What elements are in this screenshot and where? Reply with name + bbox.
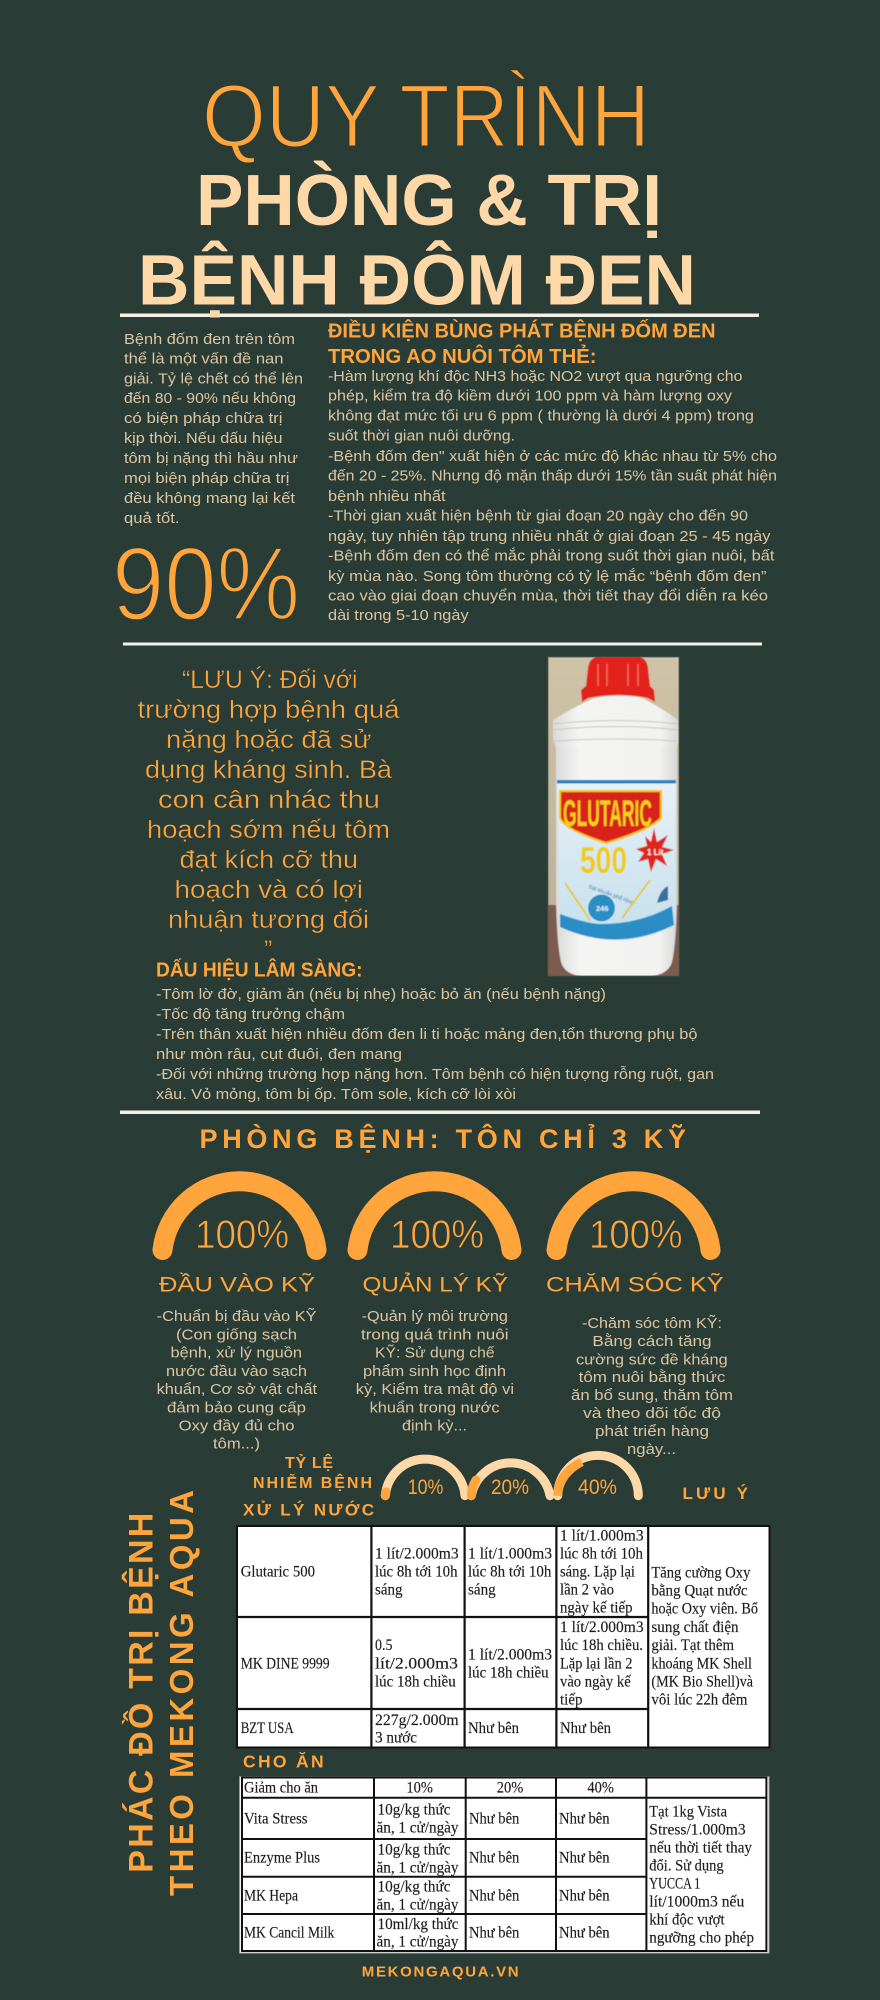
gauge: quản lý kỹ (358, 1181, 512, 1297)
table: feeding: MK Hepa (244, 1887, 298, 1904)
title: BỆNH ĐÔM ĐEN (138, 241, 696, 321)
note heading: LƯU Ý (682, 1484, 749, 1503)
table: water treatment: khoáng MK Shell (651, 1655, 752, 1672)
text: quản lý kỹ: kỳ, Kiểm tra mật độ vi (356, 1382, 514, 1398)
table: water treatment: sáng. Lặp lại (560, 1564, 635, 1581)
table: feeding: 40% (587, 1780, 614, 1797)
table: feeding: ăn, 1 cử/ngày (376, 1820, 458, 1837)
table: water treatment: 1 lít/2.000m3 (560, 1619, 644, 1636)
text: chăm sóc kỹ: Bằng cách tăng (592, 1333, 712, 1350)
outbreak conditions text: -Bệnh đốm đen có thể mắc phải trong suốt thời gian nuôi, bất (328, 548, 774, 565)
table: water treatment: 227g/2.000m (375, 1712, 459, 1729)
table: water treatment: sáng (468, 1582, 496, 1599)
title: PHÒNG & TRỊ (196, 160, 662, 241)
small gauge 10%: 10% (408, 1476, 443, 1499)
table: water treatment: BZT USA (241, 1720, 294, 1737)
table: feeding: Như bên (469, 1850, 519, 1867)
table: water treatment: MK DINE 9999 (241, 1655, 330, 1672)
text: quản lý kỹ (356, 1309, 514, 1434)
outbreak conditions text: không đạt mức tối ưu 6 ppm ( thường là dưới 4 ppm) trong (328, 408, 754, 424)
gauge: quản lý kỹ: QUẢN LÝ KỸ (362, 1273, 508, 1297)
outbreak conditions text: -Bệnh đốm đen" xuất hiện ở các mức độ khác nhau từ 5% cho (328, 449, 777, 465)
table: water treatment: 0.5 (375, 1637, 392, 1654)
table: feeding: 10% (406, 1780, 433, 1797)
outbreak conditions text: ngày, tuy nhiên tập trung nhiều nhất ở giai đoạn 25 - 45 ngày (328, 529, 771, 545)
text: chăm sóc kỹ: cường sức đề kháng (576, 1352, 728, 1368)
table: water treatment: ngày kế tiếp (560, 1600, 632, 1617)
infection rate label: TỶ LỆ (285, 1453, 333, 1472)
table: water treatment: lúc 18h chiều (375, 1674, 456, 1691)
table: feeding: Như bên (469, 1925, 519, 1942)
outbreak conditions text: -Thời gian xuất hiện bệnh từ giai đoạn 20 ngày cho đến 90 (328, 509, 748, 525)
outbreak conditions text: -Hàm lượng khí độc NH3 hoặc NO2 vượt qua ngưỡng cho (328, 369, 742, 385)
table: water treatment: tiếp (560, 1692, 582, 1709)
outbreak conditions heading (328, 318, 716, 368)
outbreak conditions text: dài trong 5-10 ngày (328, 608, 469, 624)
outbreak conditions heading: ĐIỀU KIỆN BÙNG PHÁT BỆNH ĐỐM ĐEN (328, 318, 716, 342)
quote: note: nhuận tương đối (168, 906, 369, 934)
intro text block: giải. Tỷ lệ chết có thể lên (124, 372, 303, 388)
text: quản lý kỹ: trong quá trình nuôi (361, 1327, 508, 1343)
prevention heading: PHÒNG BỆNH: TÔN CHỈ 3 KỸ (200, 1122, 686, 1154)
outbreak conditions text: cao vào giai đoạn chuyển mùa, thời tiết thay đổi diễn ra kéo (328, 588, 768, 605)
table: feeding: Như bên (559, 1811, 610, 1828)
table: water treatment: bằng Quạt nước (651, 1582, 748, 1599)
intro text block: quả tốt. (124, 511, 180, 527)
table: water treatment: lúc 18h chiều (468, 1664, 549, 1681)
quote: note: ” (264, 936, 272, 964)
text: đầu vào kỹ: tôm...) (213, 1436, 260, 1452)
table: water treatment: 1 lít/2.000m3 (375, 1546, 459, 1563)
text: chăm sóc kỹ: phát triển hàng (595, 1424, 709, 1440)
intro text block: đến 80 - 90% nếu không (124, 391, 296, 407)
table: water treatment: lít/2.000m3 (375, 1655, 458, 1672)
infection rate label: NHIỄM BỆNH (253, 1473, 372, 1492)
text: đầu vào kỹ: Oxy đầy đủ cho (179, 1418, 295, 1434)
text: chăm sóc kỹ: ngày... (627, 1442, 676, 1458)
table: water treatment: lúc 18h chiều. (560, 1637, 643, 1654)
table: feeding: khí độc vượt (649, 1912, 725, 1929)
quote: note: trường hợp bệnh quá (138, 696, 400, 724)
text: đầu vào kỹ (157, 1308, 317, 1452)
table: water treatment: 1 lít/2.000m3 (468, 1646, 552, 1663)
clinical signs text: xâu. Vỏ mỏng, tôm bị ốp. Tôm sole, kích cỡ lòi xòi (156, 1087, 516, 1103)
text: chăm sóc kỹ: và theo dõi tốc độ (583, 1406, 721, 1422)
quote: note: dụng kháng sinh. Bà (145, 756, 392, 784)
table: feeding: MK Cancil Milk (244, 1925, 334, 1942)
clinical signs text: -Tôm lờ đờ, giảm ăn (nếu bị nhẹ) hoặc bỏ ăn (nếu bệnh nặng) (156, 987, 606, 1003)
title: QUY TRÌNH (202, 66, 650, 166)
vertical heading: PHÁC ĐỒ TRỊ BỆNH (122, 1513, 160, 1873)
table: feeding: Enzyme Plus (244, 1850, 320, 1867)
product photo: Glutaric 500 bottle: 246 (596, 904, 609, 913)
outbreak conditions text (328, 369, 777, 624)
intro text block (124, 332, 303, 527)
footer website: MEKONGAQUA.VN (362, 1964, 519, 1981)
table: feeding: Như bên (469, 1811, 519, 1828)
table: feeding: nếu thời tiết thay (649, 1840, 752, 1857)
product photo: Glutaric 500 bottle: GLUTARIC (563, 793, 652, 834)
table: feeding: ngưỡng cho phép (649, 1930, 754, 1947)
small gauge 20% (471, 1463, 550, 1499)
gauge: đầu vào kỹ (159, 1181, 316, 1297)
clinical signs text: -Trên thân xuất hiện nhiều đốm đen li ti hoặc mảng đen,tổn thương phụ bộ (156, 1027, 698, 1043)
product photo: Glutaric 500 bottle (548, 656, 679, 976)
text: chăm sóc kỹ: tôm nuôi bằng thức (579, 1369, 725, 1386)
clinical signs heading: DẤU HIỆU LÂM SÀNG: (156, 958, 362, 982)
table: feeding: ăn, 1 cử/ngày (376, 1934, 458, 1951)
outbreak conditions heading: TRONG AO NUÔI TÔM THẺ: (328, 344, 596, 368)
title (138, 66, 696, 321)
table: feeding (240, 1777, 769, 1953)
table: water treatment: giải. Tạt thêm (651, 1637, 735, 1654)
gauge: đầu vào kỹ: 100% (195, 1213, 289, 1257)
table: water treatment: Như bên (560, 1720, 611, 1737)
intro text block: đều không mang lại kết (124, 491, 295, 507)
small gauge 20%: 20% (491, 1476, 529, 1499)
gauge: chăm sóc kỹ (546, 1181, 724, 1297)
intro text block: có biện pháp chữa trị (124, 411, 282, 427)
table: feeding: Tạt 1kg Vista (649, 1804, 727, 1821)
vertical heading (122, 1490, 200, 1896)
small gauge 40% (558, 1455, 638, 1499)
text: chăm sóc kỹ: -Chăm sóc tôm KỸ: (582, 1315, 722, 1332)
water treatment heading: XỬ LÝ NƯỚC (243, 1501, 374, 1520)
table: feeding: 10ml/kg thức (378, 1916, 458, 1933)
table: water treatment: vôi lúc 22h đêm (651, 1692, 748, 1709)
table: feeding: Như bên (469, 1887, 519, 1904)
product photo: Glutaric 500 bottle: 500 (580, 840, 627, 881)
intro text block: tôm bị nặng thì hầu như (124, 451, 298, 467)
table: water treatment (237, 1526, 770, 1748)
text: quản lý kỹ: KỸ: Sử dụng chế (375, 1345, 495, 1362)
text: chăm sóc kỹ: ăn bổ sung, thăm tôm (571, 1388, 733, 1404)
table: feeding: 10g/kg thức (378, 1802, 450, 1819)
gauge: chăm sóc kỹ: CHĂM SÓC KỸ (546, 1273, 724, 1297)
table: feeding: Như bên (559, 1887, 610, 1904)
table: water treatment: sáng (375, 1582, 402, 1599)
clinical signs text: như mòn râu, cụt đuôi, đen mang (156, 1047, 402, 1063)
table: water treatment: lúc 8h tới 10h (375, 1564, 458, 1581)
table: water treatment: 3 nước (375, 1730, 417, 1747)
table: water treatment: 1 lít/1.000m3 (468, 1546, 552, 1563)
table: water treatment: Glutaric 500 (241, 1564, 315, 1581)
gauge: quản lý kỹ: 100% (390, 1213, 484, 1257)
product photo: Glutaric 500 bottle: Sát khuẩn phổ rộng (587, 883, 635, 906)
table: water treatment: lúc 8h tới 10h (560, 1546, 643, 1563)
table: feeding: 10g/kg thức (378, 1841, 450, 1858)
table: feeding: lít/1000m3 nếu (649, 1894, 744, 1911)
intro text block: thể là một vấn đề nan (124, 352, 284, 368)
table: water treatment: lần 2 vào (560, 1582, 614, 1599)
table: feeding: ăn, 1 cử/ngày (376, 1896, 458, 1913)
table: water treatment: Lặp lại lần 2 (560, 1655, 632, 1672)
outbreak conditions text: suốt thời gian nuôi dưỡng. (328, 429, 515, 445)
table: water treatment: lúc 8h tới 10h (468, 1564, 551, 1581)
table: feeding: Giảm cho ăn (244, 1780, 318, 1797)
small gauge 10% (385, 1459, 465, 1499)
table: water treatment: hoặc Oxy viên. Bổ (651, 1600, 758, 1617)
gauge: chăm sóc kỹ: 100% (589, 1213, 683, 1257)
table: feeding: 10g/kg thức (378, 1879, 450, 1896)
quote: note: con cân nhác thu (158, 786, 380, 814)
table: water treatment: vào ngày kế (560, 1674, 632, 1691)
outbreak conditions text: kỳ mùa nào. Song tôm thường có tỷ lệ mắc “bệnh đốm đen” (328, 568, 767, 585)
table: feeding: 20% (497, 1780, 523, 1797)
intro text block: mọi biện pháp chữa trị (124, 471, 290, 487)
table: feeding: YUCCA 1 (649, 1876, 700, 1893)
table: feeding: Như bên (559, 1925, 610, 1942)
clinical signs text (156, 987, 714, 1103)
clinical signs text: -Đối với những trường hợp nặng hơn. Tôm bệnh có hiện tượng rỗng ruột, gan (156, 1066, 714, 1083)
table: feeding: đổi. Sử dụng (649, 1858, 724, 1875)
text: đầu vào kỹ: (Con giống sạch (176, 1327, 297, 1343)
table: water treatment: (MK Bio Shell)và (651, 1674, 753, 1691)
table: water treatment: Tăng cường Oxy (651, 1564, 750, 1581)
table: water treatment: sung chất điện (651, 1619, 739, 1636)
table: feeding: Vita Stress (244, 1811, 308, 1828)
intro text block: kịp thời. Nếu dấu hiệu (124, 431, 282, 447)
text: đầu vào kỹ: đảm bảo cung cấp (167, 1400, 306, 1416)
quote: note: đạt kích cỡ thu (180, 846, 358, 874)
text: quản lý kỹ: phẩm sinh học định (363, 1364, 506, 1380)
outbreak conditions text: đến 20 - 25%. Nhưng độ mặn thấp dưới 15% tần suất phát hiện (328, 469, 777, 485)
text: quản lý kỹ: định kỳ... (402, 1418, 467, 1434)
table: feeding: ăn, 1 cử/ngày (376, 1859, 458, 1876)
outbreak conditions text: bệnh nhiều nhất (328, 489, 446, 505)
outbreak conditions text: phép, kiểm tra độ kiềm dưới 100 ppm và hàm lượng oxy (328, 389, 733, 405)
table: feeding: Như bên (559, 1850, 610, 1867)
quote: note (138, 665, 400, 964)
intro text block: Bệnh đốm đen trên tôm (124, 332, 295, 348)
quote: note: “LƯU Ý: Đối với (182, 665, 358, 694)
feeding heading: CHO ĂN (243, 1751, 324, 1772)
clinical signs text: -Tốc độ tăng trưởng chậm (156, 1007, 345, 1023)
small gauge 40%: 40% (578, 1476, 617, 1499)
text: đầu vào kỹ: bệnh, xử lý nguồn (170, 1346, 302, 1362)
table: feeding: Stress/1.000m3 (649, 1822, 746, 1839)
vertical heading: THEO MEKONG AQUA (163, 1490, 200, 1896)
quote: note: hoạch và có lợi (174, 876, 363, 904)
big number 90%: 90% (112, 526, 300, 642)
table: water treatment: Như bên (468, 1720, 519, 1737)
infection rate label (253, 1453, 372, 1492)
text: đầu vào kỹ: khuẩn, Cơ sở vật chất (157, 1382, 317, 1398)
quote: note: hoạch sớm nếu tôm (147, 816, 390, 844)
text: đầu vào kỹ: nước đầu vào sạch (166, 1364, 307, 1380)
text: quản lý kỹ: -Quản lý môi trường (362, 1309, 508, 1325)
product photo: Glutaric 500 bottle: 1 Lít (647, 848, 664, 857)
text: đầu vào kỹ: -Chuẩn bị đầu vào KỸ (157, 1308, 317, 1325)
quote: note: nặng hoặc đã sử (166, 726, 372, 754)
gauge: đầu vào kỹ: ĐẦU VÀO KỸ (159, 1273, 315, 1297)
text: quản lý kỹ: khuẩn trong nước (370, 1400, 500, 1416)
table: water treatment: 1 lít/1.000m3 (560, 1528, 644, 1545)
text: chăm sóc kỹ (571, 1315, 733, 1458)
